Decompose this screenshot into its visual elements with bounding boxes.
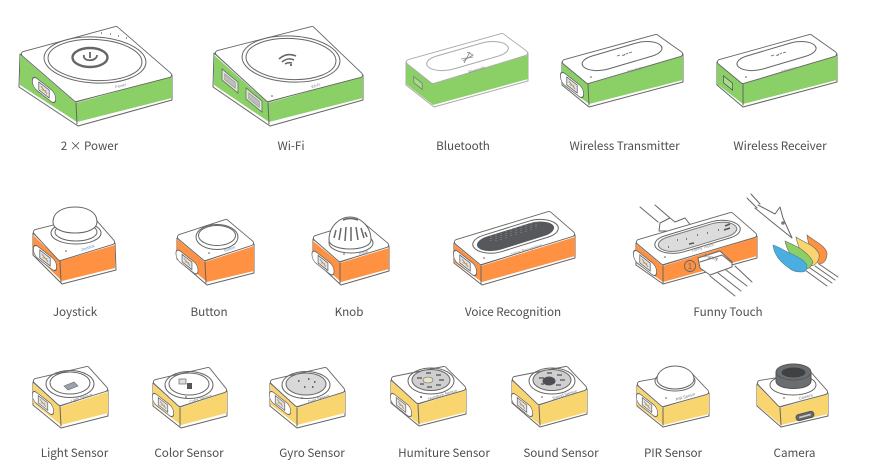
- module: Camera: [757, 364, 828, 427]
- module: Wi-Fi: Wi-Fi: [310, 82, 321, 89]
- label: Funny Touch: Funny Touch: [693, 303, 763, 320]
- module: Button: Button: [223, 244, 236, 253]
- module: Bluetooth: [406, 36, 528, 107]
- module: Funny Touch: Funny: [704, 253, 719, 263]
- module: Color Sensor: [152, 370, 227, 428]
- module: 2 x Power: [19, 29, 172, 126]
- module: Sound Sensor: Sound Sensor: [552, 388, 578, 401]
- module: Funny Touch: 1: [688, 262, 693, 271]
- module: Light Sensor: Light Sensor: [70, 392, 94, 403]
- label: Humiture Sensor: Humiture Sensor: [398, 444, 490, 461]
- module: Bluetooth: Bluetooth: [468, 65, 485, 74]
- module: Camera: Camera: [798, 392, 814, 401]
- module: Light Sensor: [32, 369, 108, 428]
- label: PIR Sensor: PIR Sensor: [644, 444, 703, 461]
- label: Wireless Transmitter: Wireless Transmitter: [569, 137, 680, 154]
- module: Sound Sensor: [511, 368, 587, 427]
- label: Bluetooth: Bluetooth: [436, 137, 490, 154]
- label: Sound Sensor: Sound Sensor: [523, 444, 599, 461]
- module: Knob: [312, 217, 389, 285]
- module: Button: [176, 222, 254, 285]
- label: Voice Recognition: Voice Recognition: [465, 303, 561, 320]
- icon: alligator clip and coloured leaf clips: [747, 194, 838, 286]
- module: Humiture Sensor: [390, 368, 466, 426]
- module: Wireless Receiver: Wireless: [781, 65, 797, 74]
- module: Gyro Sensor: Gyro Sensor: [307, 393, 331, 404]
- label: Button: Button: [190, 303, 228, 320]
- module: Wireless Transmitter: Wireless: [627, 65, 643, 74]
- label: Knob: Knob: [335, 303, 363, 320]
- label: Color Sensor: Color Sensor: [154, 444, 224, 461]
- module: PIR Sensor: PIR Sensor: [675, 391, 697, 402]
- module: Voice Recognition: [453, 214, 575, 285]
- module: Wireless Receiver: [717, 37, 837, 107]
- module: Color Sensor: Color Sensor: [189, 393, 213, 404]
- label: Gyro Sensor: Gyro Sensor: [279, 444, 345, 461]
- module: Gyro Sensor: [269, 370, 345, 428]
- module: Knob: Knob: [358, 249, 369, 256]
- label: Wi-Fi: Wi-Fi: [278, 137, 304, 154]
- module: Wi-Fi: [213, 29, 363, 126]
- module: Wireless Transmitter: [560, 37, 683, 107]
- label: Light Sensor: Light Sensor: [41, 444, 109, 461]
- module: Humiture Sensor: Humiture Sensor: [427, 388, 458, 401]
- module: Funny Touch: Funny Touch: [691, 242, 714, 253]
- module: Funny Touch: [633, 205, 757, 296]
- module: Joystick: Joystick: [80, 243, 95, 252]
- label: Wireless Receiver: Wireless Receiver: [733, 137, 827, 154]
- module: Joystick: [33, 207, 116, 284]
- module: Voice Recognition: Voice Recognition: [511, 242, 543, 257]
- label: Joystick: Joystick: [53, 303, 98, 320]
- label: 2 x Power: 2 × Power: [61, 137, 119, 154]
- module: PIR Sensor: [636, 366, 709, 427]
- label: Camera: Camera: [774, 444, 815, 461]
- module: 2 x Power: Power: [114, 81, 127, 89]
